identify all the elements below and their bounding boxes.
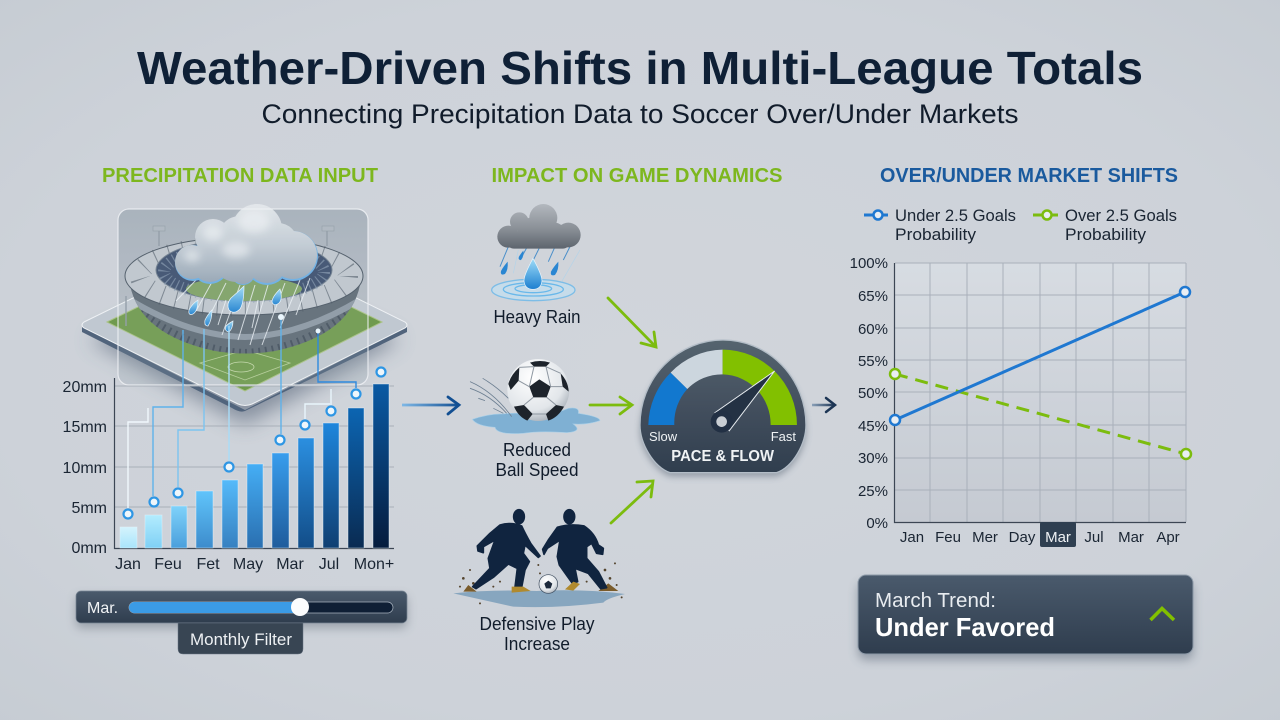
x axis labels: Apr [1156,529,1180,546]
highlighted month [1040,522,1076,547]
title: Weather-Driven Shifts in Multi-League Totals [137,42,1143,94]
mud spatter [459,562,623,604]
y axis labels: 5mm [71,500,107,517]
slider track [129,602,393,613]
blue segment [648,373,687,425]
arrow: gauge to market [812,398,835,412]
x axis labels: Mon+ [354,556,394,573]
left boot [512,587,531,593]
monthly filter slider [76,591,407,628]
x axis labels: Mar [1045,529,1071,546]
y axis labels: 25% [858,483,888,500]
y axis labels: 30% [858,450,888,467]
y axis labels: 0% [866,515,888,532]
green segment [723,350,797,425]
monthly filter tab: Monthly Filter [190,630,292,649]
water [453,590,625,607]
y axis labels: 60% [858,321,888,338]
x axis labels: May [233,556,263,573]
slider thumb [291,598,309,616]
y axis labels: 65% [858,288,888,305]
icon: two defenders in the mud [453,510,625,607]
x axis labels: Mer [972,529,998,546]
callout value: Under Favored [875,612,1055,642]
y axis labels: 15mm [63,419,107,436]
icon: soccer ball in puddle [470,359,600,434]
y axis labels: 100% [850,255,888,272]
arrow: defense to gauge [611,481,653,523]
label: defensive play increase: Defensive Play [480,614,594,634]
right boot [565,582,580,591]
icon: up chevron [1150,608,1174,620]
x axis labels: Day [1009,529,1036,546]
legend: under 2.5 goals [864,207,1016,244]
glow points on stadium [278,314,320,334]
ripples [492,279,575,301]
over line [890,369,1191,459]
label: heavy rain: Heavy Rain [494,307,580,327]
main drop [524,258,542,289]
arrow: data to impact [402,397,459,414]
translucent panel [118,209,368,385]
light segment [671,350,723,389]
rain lines [500,247,580,282]
connector nodes [124,368,386,518]
x axis labels: Jul [1084,529,1104,546]
x axis labels: Jan [115,556,141,573]
floodlights [126,226,334,326]
gauge title: PACE & FLOW [671,448,774,465]
callout label: March Trend: [875,590,996,612]
y axis labels: 55% [858,353,888,370]
x axis labels: Fet [196,556,220,573]
gauge: pace and flow [640,340,806,477]
y axis labels [850,255,888,532]
gauge: pace and flow: Fast [771,429,796,444]
left player [473,510,540,589]
connector lines [128,317,356,508]
label: reduced ball speed [496,440,578,480]
scale labels: Slow [649,429,678,444]
legend: over 2.5 goals: Probability [1065,226,1147,244]
rain streaks [176,278,310,345]
x axis labels [900,529,1180,546]
illustration: rainy stadium on a platform [82,204,407,425]
heading: impact on game dynamics: IMPACT ON GAME DYNAMICS [492,165,782,187]
panel outline [118,209,368,385]
x axis labels [115,556,394,573]
arrow: ball speed to gauge [590,397,632,414]
stadium wall [130,285,360,360]
x axis labels: Feu [935,529,961,546]
line chart: over/under probability [850,255,1191,547]
small ball [539,575,558,593]
puddle [472,408,600,434]
platform [82,243,407,425]
grid and axes [114,378,394,548]
callout: march trend [858,575,1193,660]
heading: precipitation data input: PRECIPITATION DATA INPUT [102,165,378,187]
ball [507,359,569,421]
heading: over/under market shifts: OVER/UNDER MARKET SHIFTS [880,165,1178,187]
legend: under 2.5 goals: Under 2.5 Goals [895,207,1016,225]
splash [470,378,512,417]
under line [890,287,1190,425]
legend: under 2.5 goals: Probability [895,226,977,244]
arrow: rain to gauge [608,298,656,347]
small drops [501,251,558,275]
legend: over 2.5 goals [1033,207,1177,244]
pitch base [107,255,382,391]
label: reduced ball speed: Reduced [503,440,571,460]
slider fill [129,602,300,613]
chart: monthly precipitation bars [63,314,394,573]
y axis labels: 50% [858,385,888,402]
cloud [497,204,581,249]
y axis labels: 0mm [71,540,107,557]
y axis labels: 45% [858,418,888,435]
monthly filter tab [178,623,303,654]
raindrops [189,286,281,332]
cloud [175,204,318,285]
icon: heavy rain [492,204,581,301]
y axis labels: 10mm [63,460,107,477]
slider label: Mar. [87,600,118,617]
bars [120,384,389,548]
y axis labels [63,379,107,557]
x axis labels: Feu [154,556,182,573]
x axis labels: Jul [319,556,339,573]
label: defensive play increase [480,614,594,654]
x axis labels: Mar [1118,529,1144,546]
right player [543,510,607,589]
x axis labels: Mar [276,556,304,573]
needle [711,371,775,433]
legend: over 2.5 goals: Over 2.5 Goals [1065,207,1177,225]
stadium roof [125,237,363,315]
x axis labels: Jan [900,529,924,546]
y axis labels: 20mm [63,379,107,396]
label: reduced ball speed: Ball Speed [496,460,578,480]
label: defensive play increase: Increase [504,634,570,654]
subtitle: Connecting Precipitation Data to Soccer Over/Under Markets [262,99,1018,129]
